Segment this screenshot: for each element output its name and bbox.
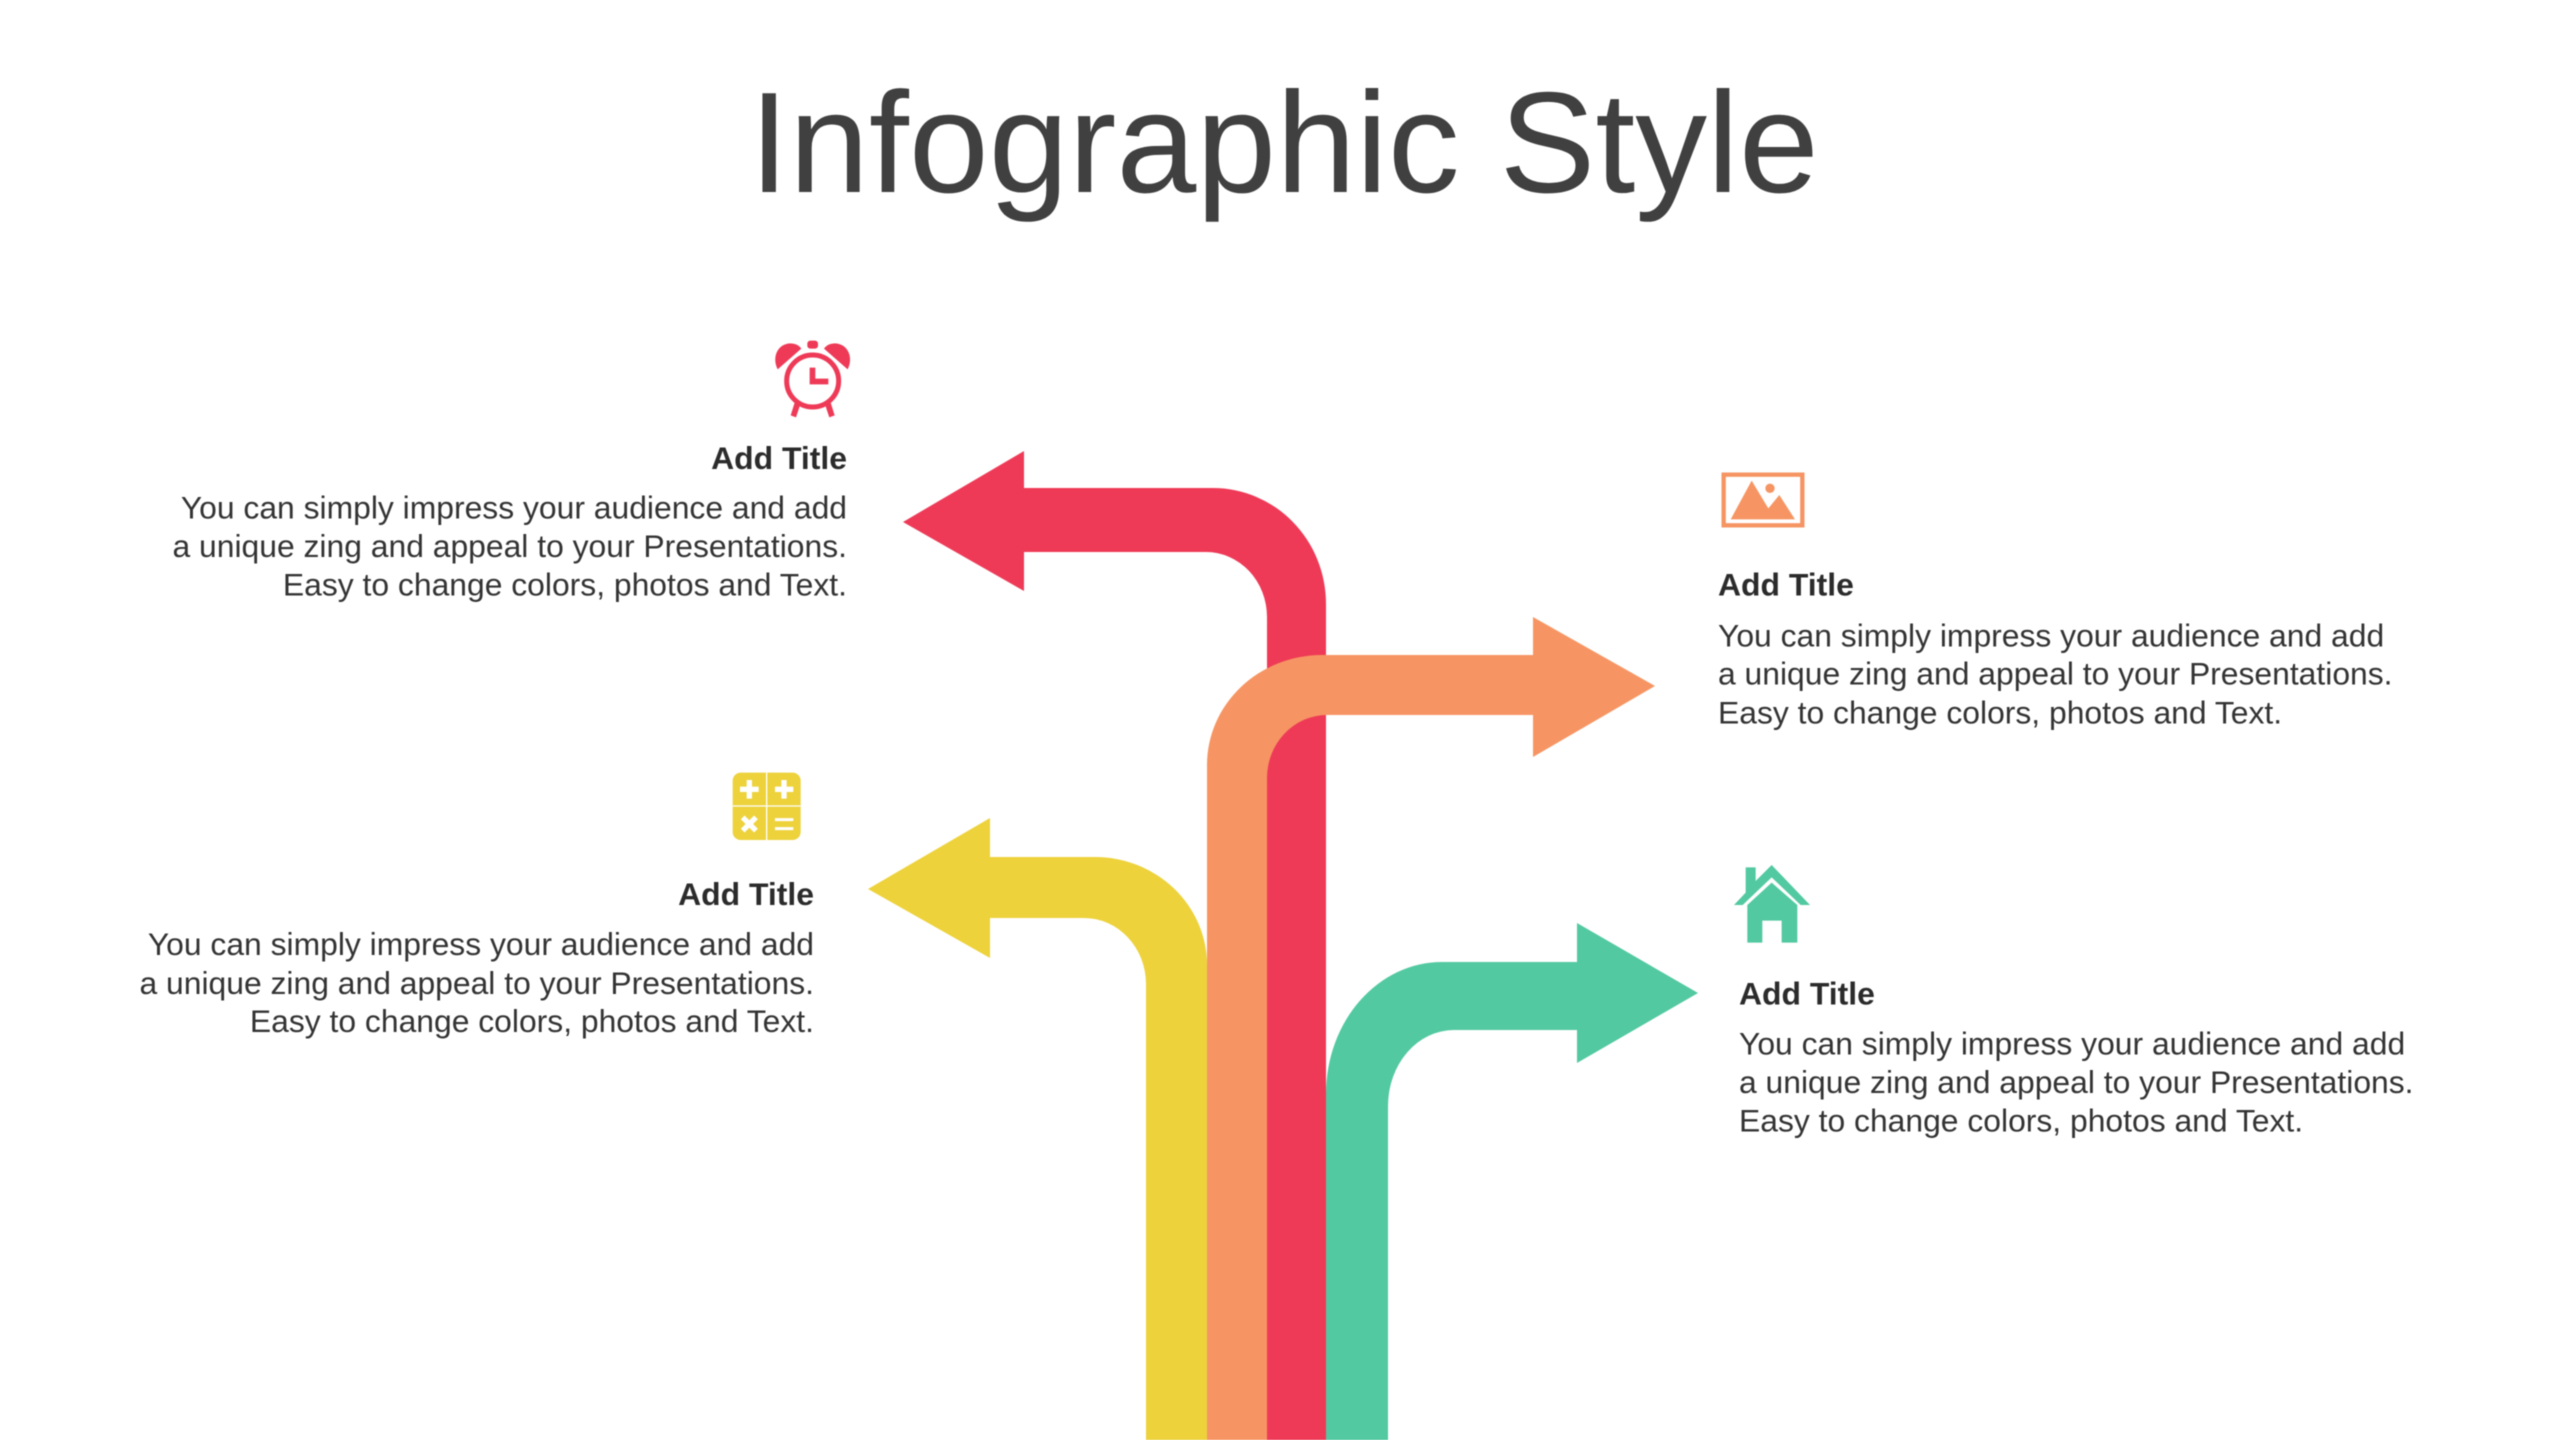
heading: Add Title: [1739, 976, 1875, 1012]
block: top right: [1718, 475, 2393, 730]
arrow: green: [1326, 923, 1698, 1440]
block: bottom right: [1734, 865, 2414, 1138]
text block: You can simply impress your audience and add: [148, 926, 814, 962]
text block: Easy to change colors, photos and Text.: [283, 566, 847, 602]
text block: [1718, 618, 2393, 730]
text block: a unique zing and appeal to your Presentations.: [1718, 656, 2393, 692]
text block: Easy to change colors, photos and Text.: [1739, 1102, 2303, 1138]
text block: You can simply impress your audience and add: [1718, 618, 2384, 654]
heading: Add Title: [1718, 566, 1854, 602]
arrow: yellow: [868, 818, 1207, 1440]
arrow: orange: [1207, 617, 1655, 1440]
block: bottom left: [139, 773, 814, 1039]
text block: You can simply impress your audience and add: [181, 490, 847, 526]
icon: alarm clock: [775, 341, 850, 417]
text block: a unique zing and appeal to your Presentations.: [1739, 1064, 2414, 1100]
block: top left: [172, 341, 850, 602]
text block: a unique zing and appeal to your Presentations.: [139, 965, 814, 1001]
title: Infographic Style: [749, 63, 1819, 223]
arrow: red: [903, 451, 1326, 1440]
icon: house: [1734, 865, 1810, 943]
text block: [139, 926, 814, 1039]
text block: You can simply impress your audience and add: [1739, 1026, 2405, 1062]
text block: Easy to change colors, photos and Text.: [250, 1003, 814, 1039]
text block: Easy to change colors, photos and Text.: [1718, 694, 2282, 730]
icon: picture: [1724, 475, 1802, 525]
text block: [172, 490, 847, 602]
text block: [1739, 1026, 2414, 1138]
heading: Add Title: [678, 876, 814, 912]
icon: calculator: [733, 773, 801, 840]
text block: a unique zing and appeal to your Presentations.: [172, 528, 847, 564]
heading: Add Title: [711, 440, 847, 476]
